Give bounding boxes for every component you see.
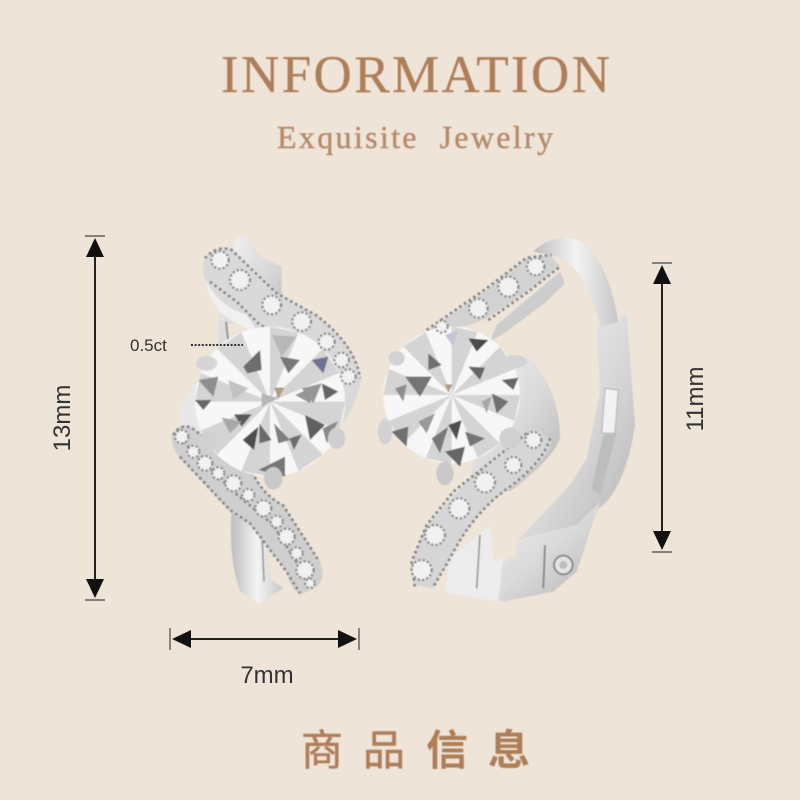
title: INFORMATION bbox=[221, 46, 610, 104]
lower post bbox=[231, 512, 283, 603]
pave edge texture bbox=[173, 249, 360, 593]
diamond bbox=[383, 327, 520, 463]
chinese heading: 信 bbox=[426, 717, 468, 778]
label: 13mm: 13mm bbox=[49, 385, 76, 451]
lower band bbox=[412, 428, 552, 588]
height dimension arrow: 11mm bbox=[652, 263, 672, 552]
left earring bbox=[172, 237, 362, 603]
clip lever bbox=[518, 312, 635, 540]
diamond bbox=[195, 327, 345, 477]
hoop arc bbox=[533, 238, 618, 392]
carat label: 0.5ct bbox=[130, 336, 167, 355]
swirl body bbox=[470, 355, 560, 492]
right earring bbox=[378, 238, 635, 602]
pave stones bbox=[412, 258, 544, 580]
label: 11mm: 11mm bbox=[682, 367, 709, 431]
lower post bbox=[445, 525, 503, 602]
chinese heading: 息 bbox=[488, 717, 530, 778]
carat callout bbox=[130, 336, 243, 355]
diamond base facets bbox=[195, 327, 345, 477]
upper band body bbox=[203, 247, 362, 428]
chinese heading: 品 bbox=[363, 717, 405, 778]
prongs bbox=[389, 351, 405, 366]
diamond dark facets bbox=[392, 330, 518, 467]
prongs bbox=[196, 356, 217, 371]
upper bar bbox=[490, 272, 565, 342]
chinese heading: 商 bbox=[301, 717, 343, 778]
pave stones bbox=[175, 251, 356, 588]
pave edge texture bbox=[412, 255, 560, 588]
subtitle: Exquisite Jewelry bbox=[277, 119, 553, 155]
upper band bbox=[427, 255, 560, 332]
diamond base facets bbox=[383, 327, 520, 463]
top hoop bbox=[218, 237, 282, 352]
hinge bbox=[480, 502, 600, 602]
width dimension arrow: 7mm bbox=[170, 628, 359, 650]
label: 7mm: 7mm bbox=[240, 662, 294, 689]
diamond dark facets bbox=[195, 335, 338, 477]
lower band bbox=[172, 425, 323, 595]
swirl body bbox=[180, 378, 277, 472]
chinese heading bbox=[301, 717, 530, 778]
height dimension arrow: 13mm bbox=[85, 236, 105, 600]
